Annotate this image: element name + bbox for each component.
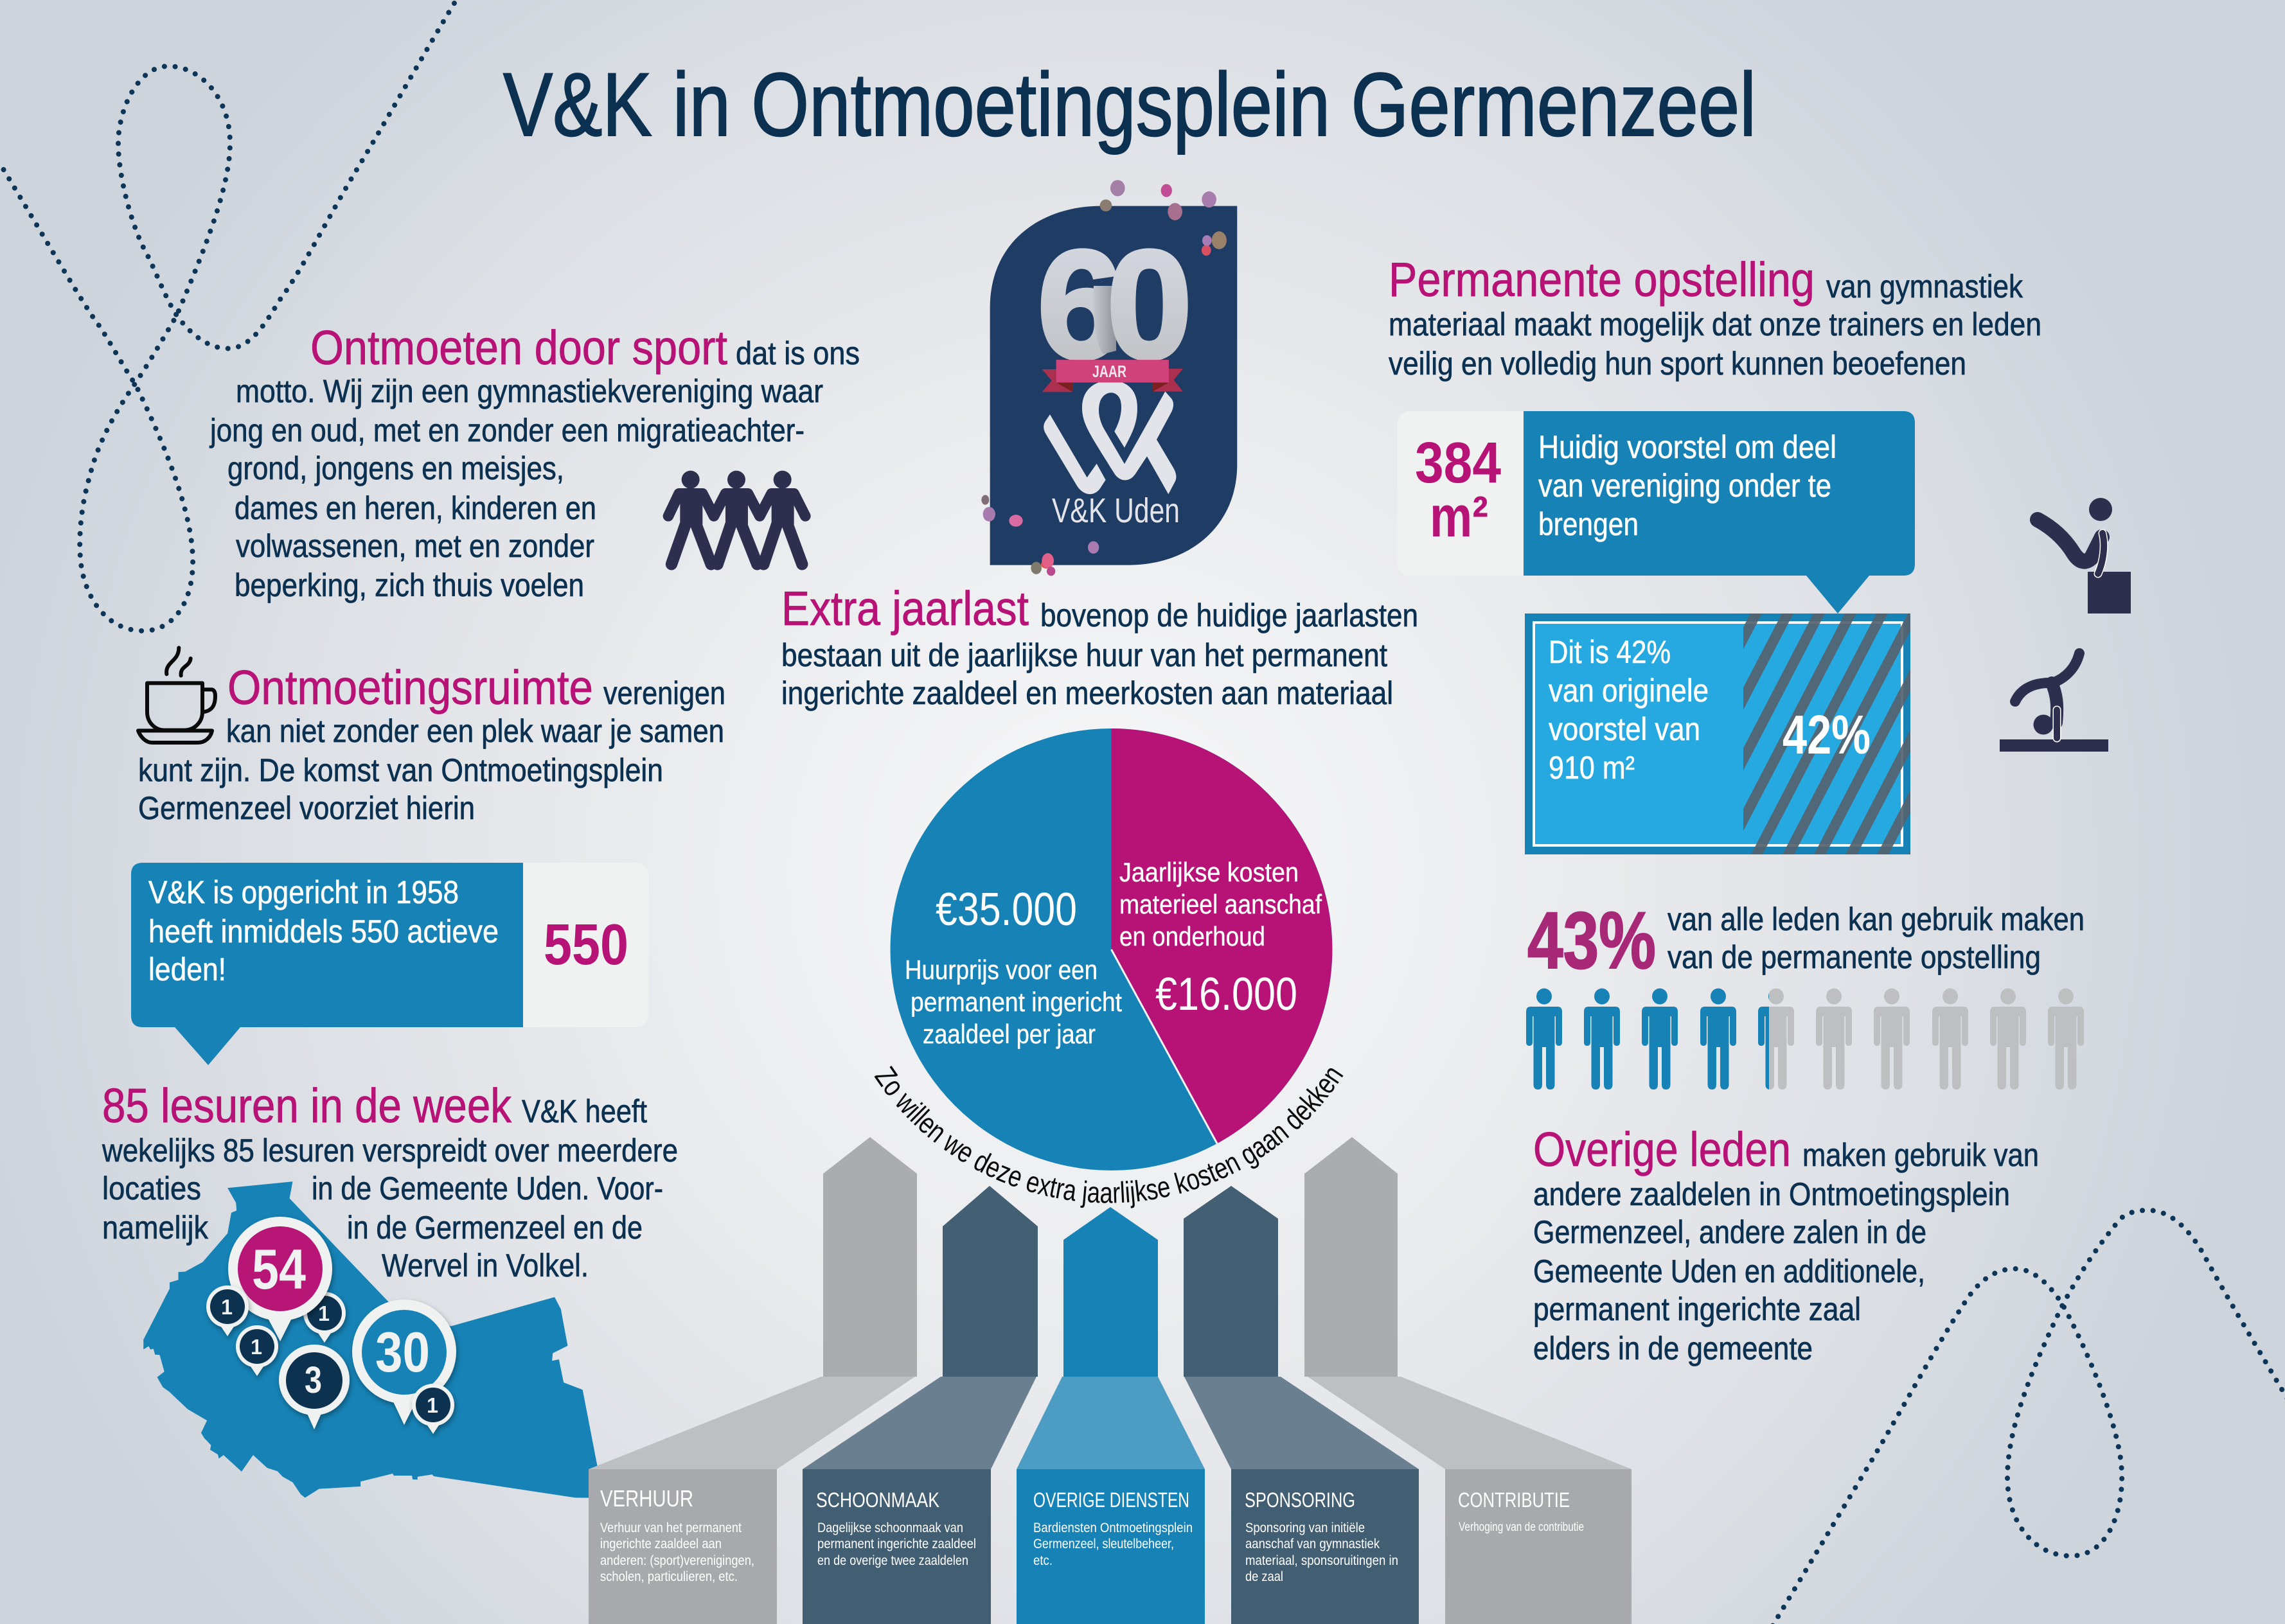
- callout: 384 m2: brengen: [1538, 506, 1639, 542]
- panel text: 910 m²: [1549, 750, 1635, 786]
- text: 85 lesuren in de week: [102, 1079, 678, 1284]
- pin: 54: 54: [252, 1237, 306, 1301]
- text: Ontmoetingsruimte: verenigen: [603, 675, 725, 711]
- pie slice: materieel: [1112, 728, 1332, 1143]
- text: Ontmoeten door sport: dames en heren, kinderen en: [235, 490, 596, 526]
- text: Permanente opstelling: materiaal maakt mogelijk dat onze trainers en leden: [1389, 306, 2041, 342]
- text: Extra jaarlast: bestaan uit de jaarlijkse huur van het permanent: [781, 637, 1387, 673]
- text: Overige leden: permanent ingerichte zaal: [1533, 1291, 1861, 1327]
- pin: 1: 1: [251, 1335, 262, 1359]
- column: Verhuur: [589, 1137, 917, 1624]
- callout: 550 leden: V&K is opgericht in 1958: [148, 874, 459, 910]
- column: Sponsoring: SPONSORING: [1245, 1488, 1355, 1512]
- text: 85 lesuren in de week: Wervel in Volkel.: [382, 1248, 589, 1284]
- pin: 30: 30: [375, 1320, 430, 1384]
- column: Verhuur: scholen, particulieren, etc.: [600, 1569, 738, 1584]
- text: Permanente opstelling: veilig en volledig hun sport kunnen beoefenen: [1389, 346, 1966, 382]
- pictogram row: people: [1526, 988, 2084, 1090]
- column: Sponsoring: aanschaf van gymnastiek: [1245, 1537, 1380, 1551]
- logo name: V&K Uden: [1052, 491, 1180, 530]
- callout: 384 m2: van vereniging onder te: [1538, 468, 1831, 504]
- pin: 3: [279, 1345, 350, 1429]
- text: Overige leden: maken gebruik van: [1802, 1137, 2039, 1173]
- callout: 550 leden: [131, 863, 648, 1065]
- column: Overige diensten: Bardiensten Ontmoetingsplein: [1033, 1521, 1193, 1535]
- column: Contributie: Verhoging van de contributie: [1459, 1521, 1584, 1534]
- text: Overige leden: Overige leden: [1533, 1122, 1791, 1176]
- text: Ontmoeten door sport: [209, 321, 860, 603]
- pie label: huur: [905, 884, 1122, 1049]
- logo ribbon: [1042, 360, 1183, 392]
- text: 85 lesuren in de week: in de Gemeente Uden. Voor-: [312, 1170, 663, 1206]
- hatched stripes: [1743, 613, 1910, 854]
- logo shape: [990, 206, 1237, 565]
- map pins: [206, 1217, 456, 1434]
- pin: 54: [228, 1217, 332, 1341]
- pie divider: [1112, 949, 1217, 1143]
- text: Ontmoeten door sport: motto. Wij zijn een gymnastiekvereniging waar: [236, 373, 823, 409]
- text: Permanente opstelling: van gymnastiek: [1826, 269, 2023, 304]
- callout: 384 m2: Huidig voorstel om deel: [1538, 429, 1836, 465]
- callout: 384 m2: [1398, 411, 1915, 613]
- pin: 30: [352, 1300, 456, 1425]
- icon: gymnast handstand: [2000, 653, 2108, 752]
- statistic: 43 percent: van alle leden kan gebruik maken: [1667, 901, 2085, 937]
- text: 85 lesuren in de week: in de Germenzeel en de: [347, 1210, 643, 1246]
- panel text: voorstel van: [1549, 711, 1700, 747]
- text: Overige leden: Gemeente Uden en additionele,: [1533, 1253, 1925, 1289]
- text: Overige leden: andere zaaldelen in Ontmoetingsplein: [1533, 1176, 2010, 1212]
- confetti: [981, 180, 1227, 576]
- text: 85 lesuren in de week: 85 lesuren in de week: [102, 1079, 511, 1133]
- column: Sponsoring: Sponsoring van initiële: [1245, 1521, 1365, 1535]
- column: Verhuur: Verhuur van het permanent: [600, 1521, 742, 1535]
- pie label: materieel: Jaarlijkse kosten: [1119, 857, 1299, 887]
- column: Schoonmaak: en de overige twee zaaldelen: [817, 1553, 968, 1568]
- column: Overige diensten: OVERIGE DIENSTEN: [1033, 1488, 1189, 1512]
- title: V&K in Ontmoetingsplein Germenzeel: [503, 54, 1756, 155]
- text: Ontmoeten door sport: Ontmoeten door sport: [310, 321, 727, 375]
- icon: coffee cup: [138, 648, 215, 743]
- text: Overige leden: Germenzeel, andere zalen in de: [1533, 1214, 1926, 1250]
- text: Permanente opstelling: [1389, 252, 2041, 382]
- pin: 1: 1: [427, 1393, 438, 1417]
- logo number 60: [1037, 218, 1192, 391]
- pie chart: [891, 728, 1333, 1170]
- text: 85 lesuren in de week: namelijk: [102, 1210, 209, 1246]
- pie label: huur: Huurprijs voor een: [905, 955, 1098, 985]
- curved caption: Zo willen we deze extra jaarlijkse kosten gaan dekken: [874, 1066, 1343, 1208]
- text: Ontmoetingsruimte: Germenzeel voorziet hierin: [138, 790, 475, 826]
- text: 85 lesuren in de week: wekelijks 85 lesuren verspreidt over meerdere: [102, 1133, 678, 1169]
- column: Sponsoring: de zaal: [1245, 1569, 1283, 1584]
- column: Schoonmaak: permanent ingerichte zaaldeel: [817, 1537, 976, 1551]
- statistic: 43 percent: [1527, 896, 2085, 985]
- column: Contributie: [1304, 1137, 1632, 1624]
- text: Extra jaarlast: ingerichte zaaldeel en meerkosten aan materiaal: [781, 675, 1393, 711]
- callout: 550 leden: leden!: [148, 951, 226, 987]
- pin: 1: [412, 1384, 454, 1434]
- column: Schoonmaak: SCHOONMAAK: [816, 1488, 939, 1512]
- text: Extra jaarlast: [781, 581, 1418, 711]
- pie label: materieel: en onderhoud: [1119, 921, 1265, 951]
- text: Extra jaarlast: Extra jaarlast: [781, 581, 1029, 635]
- text: Ontmoetingsruimte: [138, 660, 725, 826]
- panel text: van originele: [1549, 673, 1709, 709]
- pin: 1: [206, 1285, 249, 1336]
- text: Ontmoetingsruimte: Ontmoetingsruimte: [227, 660, 593, 714]
- text: Ontmoetingsruimte: kan niet zonder een plek waar je samen: [226, 713, 724, 749]
- pin: 1: [236, 1325, 278, 1376]
- callout: 384 m2: 384: [1415, 431, 1501, 495]
- logo number 60: 0: [1107, 218, 1192, 391]
- text: Ontmoeten door sport: volwassenen, met en zonder: [236, 528, 594, 564]
- pin: 1: 1: [221, 1295, 233, 1319]
- ribbon label: JAAR: [1092, 362, 1126, 381]
- map: gemeente Uden: [143, 1181, 605, 1498]
- pie label: huur: €35.000: [936, 884, 1077, 935]
- column diagram: income sources: [589, 1137, 1632, 1624]
- text: Overige leden: elders in de gemeente: [1533, 1330, 1813, 1366]
- text: 85 lesuren in de week: locaties: [102, 1170, 201, 1206]
- text: Overige leden: [1533, 1122, 2039, 1366]
- panel: 42 percent: [1525, 613, 1910, 854]
- pie label: huur: permanent ingericht: [911, 987, 1122, 1017]
- callout: 550 leden: heeft inmiddels 550 actieve: [148, 914, 499, 949]
- pin: 3: 3: [305, 1359, 322, 1401]
- pie label: huur: zaaldeel per jaar: [923, 1019, 1096, 1049]
- column: Sponsoring: [1184, 1186, 1419, 1624]
- pin: 1: [303, 1292, 346, 1343]
- text: 85 lesuren in de week: V&K heeft: [522, 1093, 647, 1129]
- pin: 1: 1: [318, 1302, 330, 1325]
- column: Overige diensten: etc.: [1033, 1553, 1053, 1568]
- statistic: 43 percent: van de permanente opstelling: [1667, 939, 2041, 975]
- pie label: materieel: [1119, 857, 1322, 1020]
- column: Verhuur: VERHUUR: [600, 1485, 693, 1512]
- icon: three people: [668, 471, 805, 564]
- column: Schoonmaak: [803, 1186, 1038, 1624]
- text: Permanente opstelling: Permanente opstelling: [1389, 252, 1815, 306]
- column: Verhuur: anderen: (sport)verenigingen,: [600, 1553, 754, 1568]
- column: Verhuur: ingerichte zaaldeel aan: [600, 1537, 722, 1551]
- text: Extra jaarlast: bovenop de huidige jaarlasten: [1040, 597, 1418, 633]
- text: Ontmoeten door sport: dat is ons: [736, 335, 860, 371]
- pie label: materieel: materieel aanschaf: [1119, 889, 1322, 919]
- column: Schoonmaak: Dagelijkse schoonmaak van: [817, 1521, 963, 1535]
- column: Contributie: CONTRIBUTIE: [1458, 1488, 1570, 1512]
- logo number 60: 6: [1037, 218, 1123, 391]
- dotted line top left: [0, 3, 454, 631]
- text: Ontmoeten door sport: jong en oud, met en zonder een migratieachter-: [209, 412, 805, 448]
- text: Ontmoeten door sport: grond, jongens en meisjes,: [227, 450, 564, 486]
- statistic: 43 percent: 43%: [1527, 896, 1656, 985]
- column: Overige diensten: Germenzeel, sleutelbeheer,: [1033, 1537, 1174, 1551]
- text: Ontmoeten door sport: beperking, zich thuis voelen: [235, 567, 584, 603]
- panel text: Dit is 42%: [1549, 634, 1671, 670]
- logo: 60 jaar V&K Uden: [981, 180, 1237, 576]
- panel figure: 42%: [1783, 705, 1871, 766]
- icon: gymnast on vault: [2038, 498, 2131, 613]
- text: Ontmoetingsruimte: kunt zijn. De komst van Ontmoetingsplein: [138, 752, 663, 788]
- callout: 384 m2: m²: [1430, 485, 1488, 549]
- panel text: [1549, 634, 1709, 786]
- dotted line bottom right: [1767, 1210, 2285, 1624]
- pie slice: huurprijs: [891, 728, 1333, 1170]
- column: Overige diensten: [1017, 1207, 1205, 1624]
- callout: 550 leden: 550: [544, 913, 628, 977]
- column: Sponsoring: materiaal, sponsoruitingen in: [1245, 1553, 1398, 1568]
- pie label: materieel: €16.000: [1155, 969, 1297, 1020]
